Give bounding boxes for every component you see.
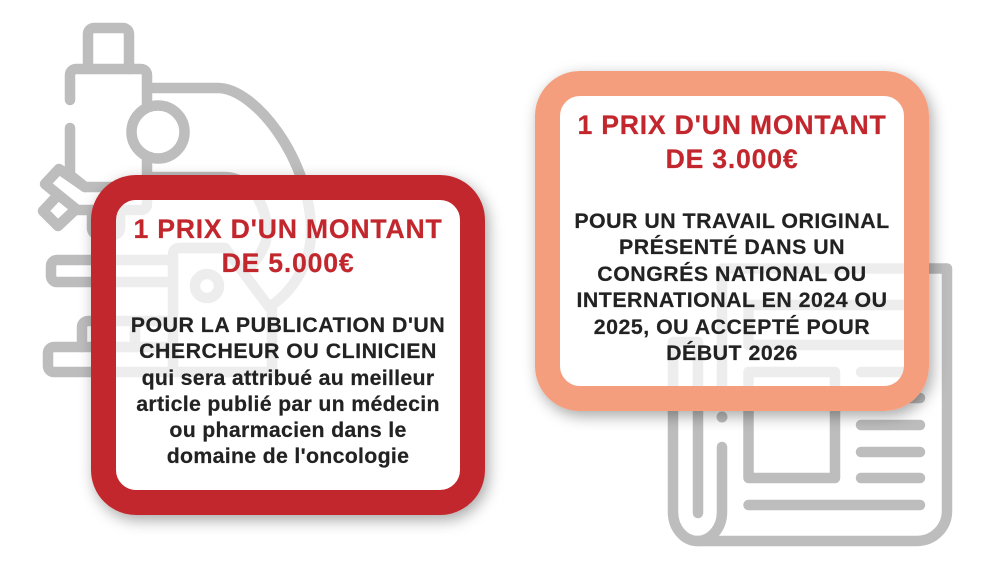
text block: prize 3000 description: INTERNATIONAL EN 2024 OU <box>576 288 888 312</box>
text block: prize 3000 description <box>574 208 890 365</box>
text block: prize 5000 description: domaine de l'oncologie <box>167 444 409 468</box>
text block: prize 5000 description: article publié par un médecin <box>136 392 440 416</box>
text block: prize 3000 description: POUR UN TRAVAIL ORIGINAL <box>574 208 890 232</box>
text block: prize 5000 description: CHERCHEUR OU CLINICIEN <box>139 339 437 363</box>
heading: prize 5000: DE 5.000€ <box>222 248 354 278</box>
panel: prize 3000 <box>535 71 929 411</box>
text block: prize 5000 description <box>131 313 445 468</box>
heading: prize 3000: 1 PRIX D'UN MONTANT <box>577 110 887 140</box>
text block: prize 3000 description: 2025, OU ACCEPTÉ POUR <box>594 314 870 338</box>
text block: prize 3000 description: PRÉSENTÉ DANS UN <box>619 235 845 259</box>
heading: prize 3000 <box>577 110 887 174</box>
text block: prize 3000 description: CONGRÉS NATIONAL OU <box>597 262 867 286</box>
text block: prize 3000 description: DÉBUT 2026 <box>666 341 798 365</box>
text block: prize 5000 description: qui sera attribué au meilleur <box>142 366 434 390</box>
text block: prize 5000 description: POUR LA PUBLICATION D'UN <box>131 313 445 337</box>
heading: prize 5000 <box>133 214 443 278</box>
heading: prize 5000: 1 PRIX D'UN MONTANT <box>133 214 443 244</box>
text block: prize 5000 description: ou pharmacien dans le <box>169 418 407 442</box>
panel: prize 5000 <box>91 175 485 515</box>
heading: prize 3000: DE 3.000€ <box>666 144 798 174</box>
